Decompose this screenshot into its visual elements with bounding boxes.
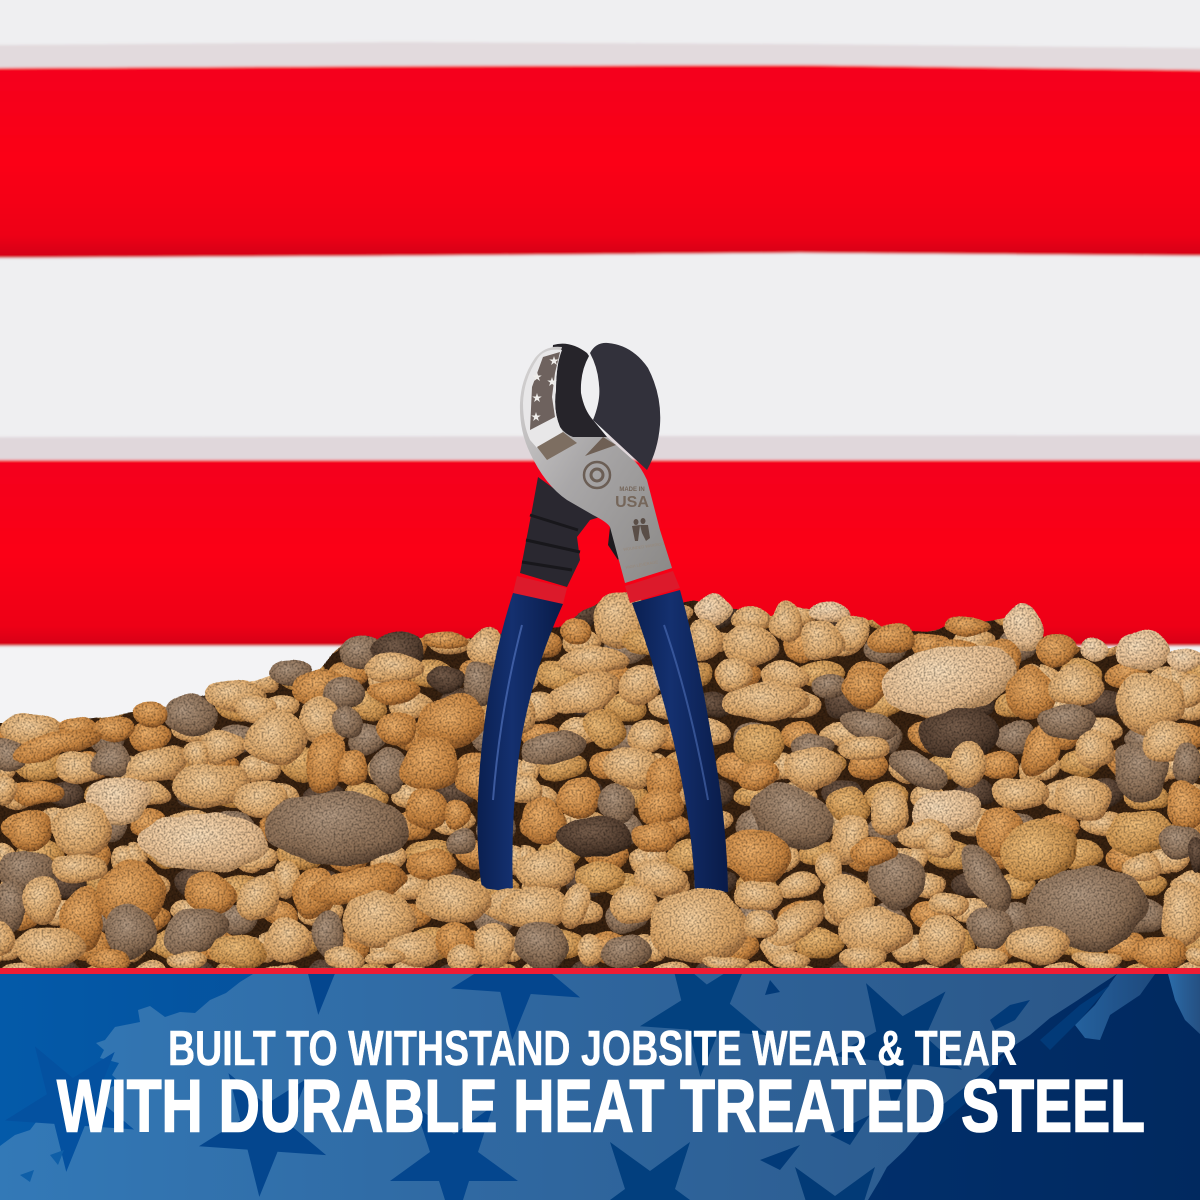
engraved stripes: [537, 432, 577, 460]
lower grip of back arm: [520, 477, 600, 587]
distressed brush stroke: [0, 974, 1200, 1200]
pliers: cable cutter tool: [477, 343, 728, 892]
engraved small lines: WOUNDED WARRIOR: [623, 541, 665, 552]
engraved flag panel with stars: [530, 352, 560, 430]
rock pile behind the pliers: [0, 592, 1200, 990]
background: american flag stripes: [0, 0, 1200, 746]
red collars: [513, 576, 567, 604]
engraved made in USA mark: USA: [615, 494, 649, 511]
blue banner background: [0, 974, 1200, 1200]
right blue handle: [632, 590, 728, 892]
engraved soldiers icon: [632, 518, 650, 541]
brush speckle marks: [20, 980, 1110, 1182]
engraved round logo: [584, 462, 610, 488]
left blue handle: [477, 593, 563, 892]
engraved made in USA mark: [615, 487, 649, 511]
banner stars: [6, 974, 962, 1200]
right inner pivot shadow: [608, 527, 622, 560]
inner cutting face of front jaw: [550, 344, 607, 441]
engraved small lines: [623, 541, 665, 570]
bottom banner: [0, 968, 1200, 1200]
dark base under the gravel: [0, 900, 1200, 970]
polished front jaw: [520, 347, 672, 583]
red divider bar: [0, 968, 1200, 974]
engraved small lines: HIGH LEVERAGE: [625, 559, 659, 570]
back jaw, dark coated: [590, 343, 660, 470]
engraved made in USA mark: MADE IN: [619, 487, 645, 493]
rocks in front of the pliers: [344, 875, 1200, 970]
